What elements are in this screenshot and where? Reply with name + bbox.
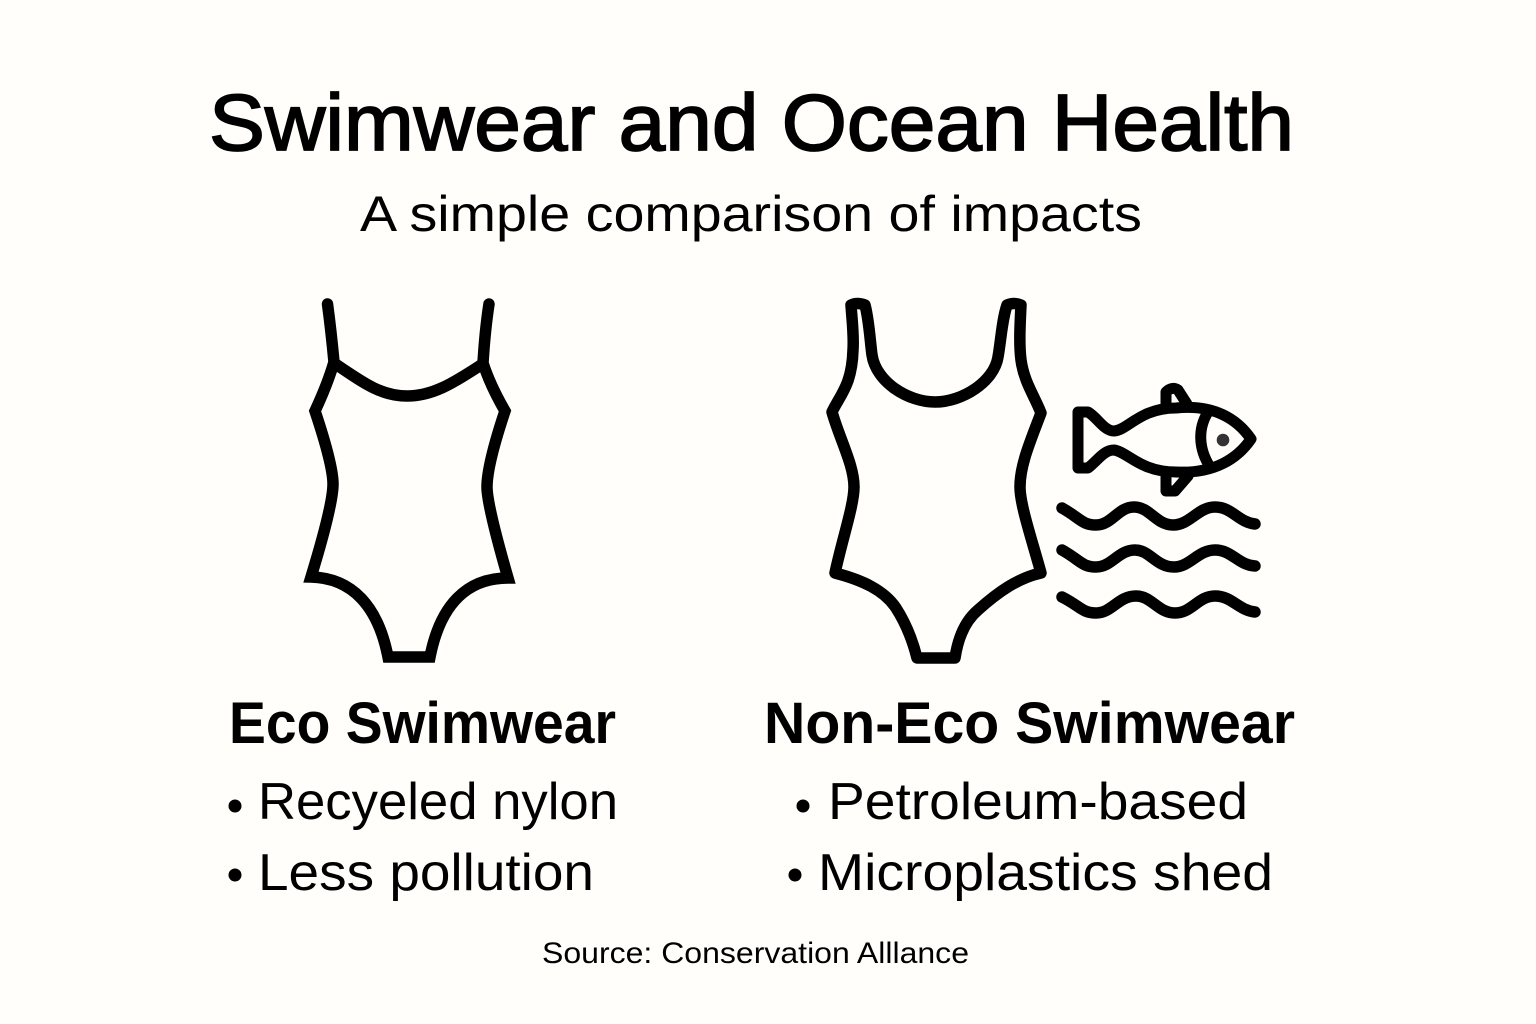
source note: Source: Conservation Alllance xyxy=(542,937,969,970)
heading: non-eco swimwear: Non-Eco Swimwear xyxy=(764,691,1295,756)
panel: eco swimwear xyxy=(228,304,618,902)
bullet: recycled nylon: Recyeled nylon xyxy=(258,773,618,831)
non-eco bullet list xyxy=(788,773,1273,902)
icon: eco swimsuit xyxy=(311,304,508,657)
icon: fish xyxy=(1078,388,1251,491)
panel: non-eco swimwear xyxy=(764,304,1295,902)
subtitle: A simple comparison of impacts xyxy=(360,186,1142,242)
eco bullet list xyxy=(228,773,618,902)
bullet: microplastics shed: Microplastics shed xyxy=(818,844,1273,902)
bullet: less pollution: Less pollution xyxy=(258,844,594,902)
icon: water waves xyxy=(1062,507,1255,613)
title: Swimwear and Ocean Health xyxy=(209,78,1294,167)
bullet: petroleum-based: Petroleum-based xyxy=(828,773,1248,831)
heading: eco swimwear: Eco Swimwear xyxy=(229,691,616,756)
icon: non-eco swimsuit xyxy=(832,304,1041,658)
